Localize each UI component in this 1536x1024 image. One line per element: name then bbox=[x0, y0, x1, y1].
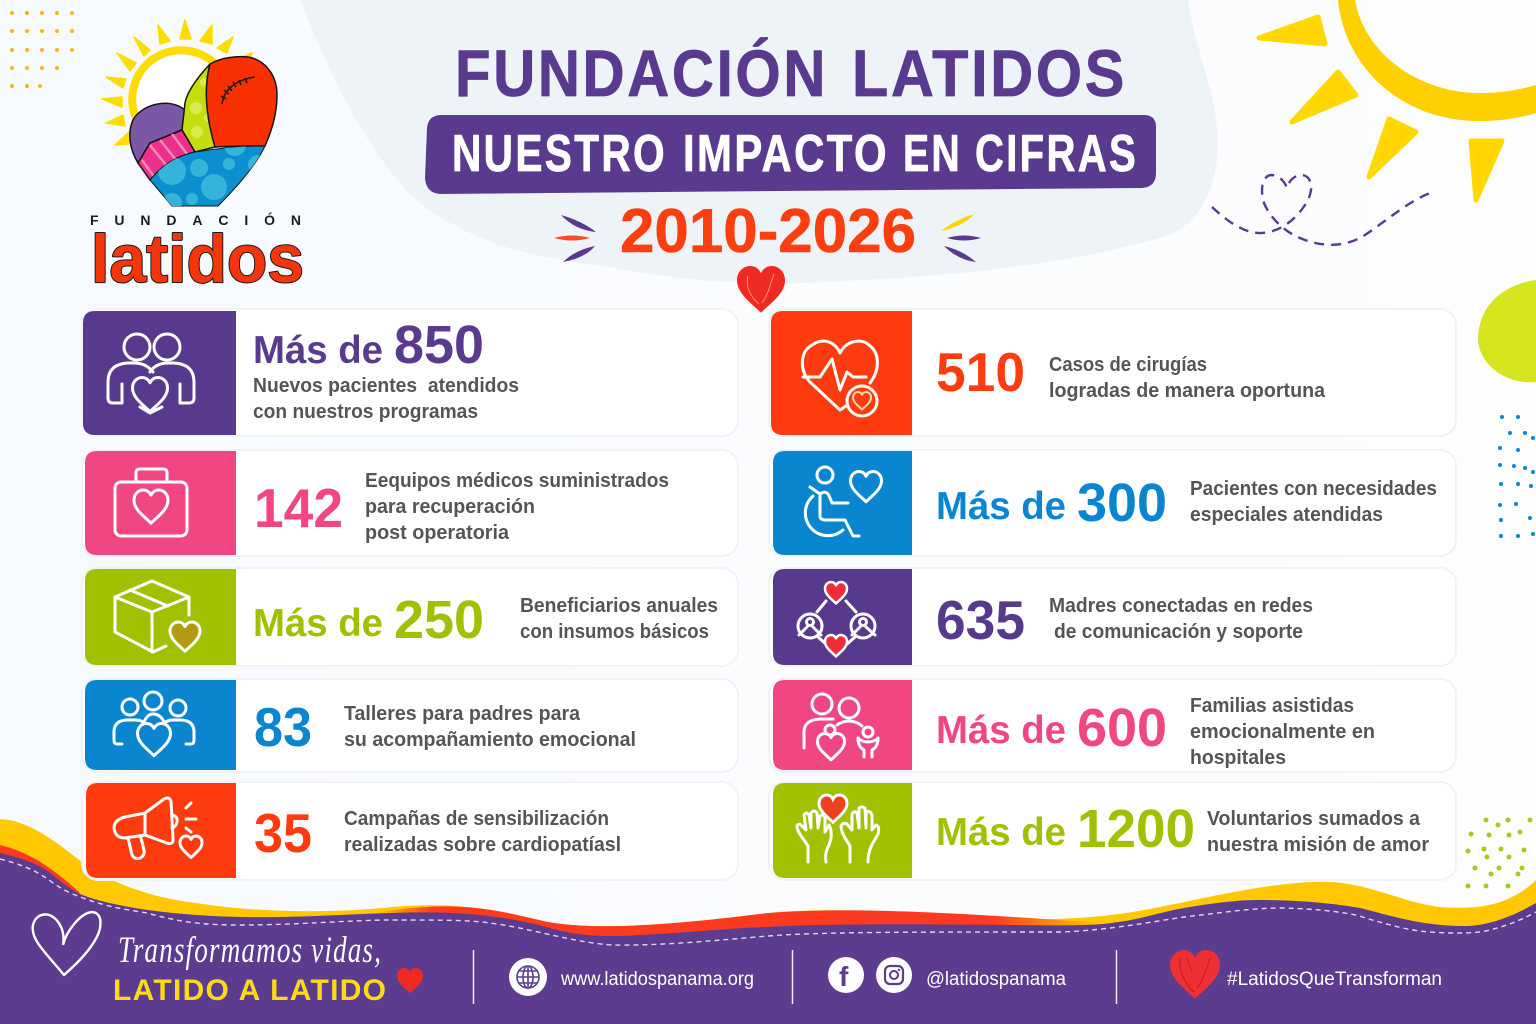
icon: globe bbox=[509, 958, 547, 996]
description: nuestra misión de amor bbox=[1207, 834, 1429, 856]
description bbox=[1190, 695, 1375, 769]
decorative dots: blue bbox=[1500, 417, 1533, 536]
description bbox=[253, 375, 519, 423]
description bbox=[344, 808, 621, 856]
description: realizadas sobre cardiopatíasl bbox=[344, 834, 621, 856]
heart under years bbox=[737, 266, 785, 313]
years: 2010-2026 bbox=[620, 197, 916, 266]
sparks right bbox=[941, 214, 981, 262]
card 10: volunteers bbox=[769, 782, 1456, 880]
description: Eequipos médicos suministrados bbox=[365, 470, 669, 492]
subtitle banner: CIFRAS bbox=[975, 125, 1138, 183]
value bbox=[936, 799, 1195, 859]
icon: family bbox=[804, 694, 878, 760]
value: 600 bbox=[1077, 698, 1167, 758]
social: @latidospanama bbox=[926, 969, 1066, 990]
description: con insumos básicos bbox=[520, 621, 709, 643]
panel red bbox=[86, 783, 236, 878]
panel pink bbox=[85, 451, 236, 555]
logo sun rays bbox=[102, 20, 252, 145]
subtitle banner: NUESTRO bbox=[452, 125, 667, 183]
logo name latidos: latidos bbox=[91, 221, 304, 297]
panel red bbox=[771, 311, 912, 435]
description: Beneficiarios anuales bbox=[520, 595, 718, 617]
value: Más de bbox=[936, 709, 1066, 752]
description: especiales atendidas bbox=[1190, 504, 1383, 526]
value bbox=[936, 698, 1167, 758]
logo heart green patch bbox=[182, 64, 215, 152]
description: para recuperación bbox=[365, 496, 535, 518]
description bbox=[1207, 808, 1429, 856]
panel purple bbox=[773, 569, 912, 665]
footer waves bbox=[0, 819, 1536, 1024]
description: Campañas de sensibilización bbox=[344, 808, 609, 830]
icon: mothers network bbox=[798, 582, 875, 656]
website bbox=[509, 958, 754, 996]
value: Más de bbox=[936, 811, 1066, 854]
divider bbox=[474, 950, 1116, 1004]
value: 142 bbox=[254, 477, 343, 539]
icon: big red heart bbox=[1170, 950, 1220, 999]
lime blob right bbox=[1478, 280, 1536, 382]
description: su acompañamiento emocional bbox=[344, 729, 636, 751]
description: Pacientes con necesidades bbox=[1190, 478, 1437, 500]
value: Más de bbox=[253, 329, 383, 372]
description bbox=[344, 703, 636, 751]
subtitle banner bbox=[425, 115, 1156, 194]
value: 250 bbox=[394, 590, 484, 650]
description: Talleres para padres para bbox=[344, 703, 581, 725]
panel pink bbox=[773, 680, 912, 770]
icon: megaphone bbox=[114, 798, 202, 859]
logo sun ring bbox=[132, 50, 222, 130]
hashtag: #LatidosQueTransforman bbox=[1227, 969, 1442, 990]
icon: raised hands with heart bbox=[797, 795, 879, 862]
subtitle banner: EN bbox=[903, 125, 962, 183]
panel blue bbox=[773, 451, 912, 555]
card 3: beneficiaries bbox=[82, 568, 738, 666]
dashed heart flourish bbox=[1212, 175, 1433, 245]
value: 35 bbox=[254, 802, 312, 864]
icon: instagram bbox=[876, 957, 912, 993]
sun decoration top right bbox=[1259, 0, 1536, 200]
hashtag bbox=[1170, 950, 1442, 999]
logo heart red patch bbox=[206, 57, 277, 147]
description: emocionalmente en bbox=[1190, 721, 1375, 743]
value: 300 bbox=[1077, 473, 1167, 533]
card 9: families bbox=[769, 679, 1456, 772]
title bbox=[455, 36, 1127, 110]
icon: medical case bbox=[115, 469, 187, 536]
logo heart blue patch bbox=[150, 146, 266, 206]
value: 850 bbox=[394, 315, 484, 375]
card 2: medical equipment bbox=[82, 450, 738, 556]
card 4: workshops bbox=[82, 679, 738, 772]
icon: heart with pulse bbox=[802, 341, 877, 416]
description: de comunicación y soporte bbox=[1054, 621, 1303, 643]
decorative dots: top left bbox=[12, 13, 72, 86]
footer dashed stitch bbox=[0, 859, 1536, 945]
icon: facebook bbox=[828, 957, 864, 993]
description: logradas de manera oportuna bbox=[1049, 380, 1326, 402]
description bbox=[1049, 595, 1313, 643]
description: post operatoria bbox=[365, 522, 510, 544]
icon: group with heart bbox=[114, 692, 194, 756]
icon: two people with heart bbox=[108, 334, 194, 413]
description: hospitales bbox=[1190, 747, 1286, 769]
card 1: new patients bbox=[82, 309, 738, 436]
value: 83 bbox=[254, 696, 312, 758]
logo wordmark: FUNDACIÓN bbox=[90, 211, 301, 228]
description: con nuestros programas bbox=[253, 401, 478, 423]
icon: facebook: f bbox=[839, 961, 849, 992]
description bbox=[1190, 478, 1437, 526]
card 7: special needs bbox=[769, 450, 1456, 556]
description: Familias asistidas bbox=[1190, 695, 1354, 717]
card 6: surgeries bbox=[769, 309, 1456, 436]
sparks left bbox=[554, 215, 596, 262]
value: Más de bbox=[936, 485, 1066, 528]
social bbox=[828, 957, 1066, 993]
slogan: LATIDO A LATIDO bbox=[113, 974, 386, 1007]
title: LATIDOS bbox=[852, 36, 1127, 110]
value: Más de bbox=[253, 602, 383, 645]
value: 510 bbox=[936, 341, 1025, 403]
description bbox=[520, 595, 718, 643]
subtitle banner: IMPACTO bbox=[683, 125, 889, 183]
value: 635 bbox=[936, 589, 1025, 651]
value bbox=[936, 473, 1167, 533]
slogan: Transformamos vidas, bbox=[118, 930, 382, 971]
title: FUNDACIÓN bbox=[455, 36, 828, 110]
panel green bbox=[85, 569, 236, 665]
description: Nuevos pacientes atendidos bbox=[253, 375, 519, 397]
description bbox=[1049, 354, 1326, 402]
logo: Fundación Latidos bbox=[90, 20, 304, 297]
icon: white line heart bbox=[33, 912, 100, 975]
logo heart pink patch bbox=[138, 130, 195, 180]
description bbox=[365, 470, 669, 544]
panel green bbox=[773, 783, 912, 878]
description: Voluntarios sumados a bbox=[1207, 808, 1421, 830]
value bbox=[253, 315, 484, 375]
icon: small red heart bbox=[397, 968, 423, 993]
icon: wheelchair with heart bbox=[805, 467, 882, 536]
value: 1200 bbox=[1077, 799, 1195, 859]
description: Casos de cirugías bbox=[1049, 354, 1207, 376]
website: www.latidospanama.org bbox=[560, 969, 754, 990]
icon: box with heart bbox=[115, 581, 200, 652]
card 5: campaigns bbox=[82, 782, 738, 880]
panel purple bbox=[83, 311, 236, 435]
card 8: mothers bbox=[769, 568, 1456, 666]
slogan bbox=[113, 930, 386, 1007]
logo heart purple lobe bbox=[130, 103, 185, 163]
description: Madres conectadas en redes bbox=[1049, 595, 1313, 617]
decorative dots: green bbox=[1468, 820, 1530, 886]
panel blue bbox=[85, 680, 236, 770]
value bbox=[253, 590, 484, 650]
